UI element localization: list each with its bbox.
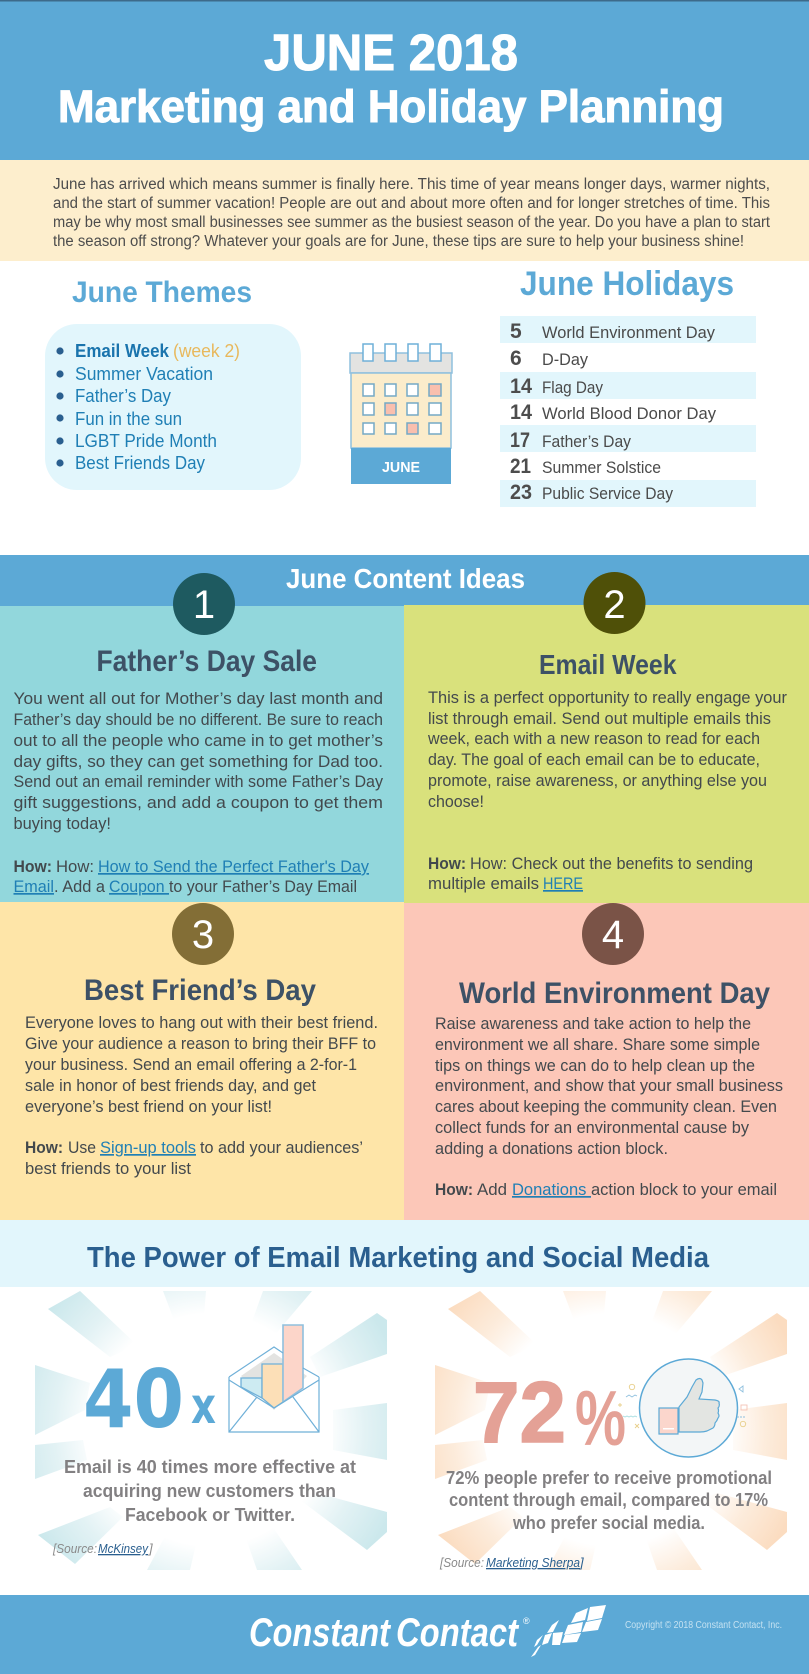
number badge 1 [173,573,235,635]
big number 72%: % [575,1374,626,1462]
body text: choose! [428,792,484,811]
title line 1: JUNE 2018 [264,24,518,81]
how-to text: Donations [512,1180,591,1199]
how-to text [435,1180,777,1199]
number badge 4: 4 [602,913,624,957]
heading: Email Week [539,649,677,680]
copyright: Copyright © 2018 Constant Contact, Inc. [625,1620,782,1631]
panel: idea 3 Best Friend's Day [0,902,404,1220]
body text: environment, and show that your small business [435,1076,783,1095]
holiday table: Public Service Day [542,484,673,503]
source note: ] [147,1541,153,1556]
holiday table: World Environment Day [542,323,715,342]
holiday table: 5 [510,320,522,343]
source note: [Source: [52,1541,97,1556]
source note: ] [578,1555,584,1570]
body text: tips on things we can do to help clean up the [435,1056,755,1075]
content ideas band [0,555,809,606]
sunburst rays [435,1291,787,1570]
how-to text [25,1138,363,1178]
how-to text: How: [25,1138,63,1157]
heading: June Themes: June Themes [72,276,252,309]
intro panel: may be why most small businesses see summer as the busiest season of the year. Do you have a plan to start [53,214,771,231]
holiday table: World Blood Donor Day [542,404,716,423]
statistic text: acquiring new customers than [83,1481,336,1501]
holiday table: D-Day [542,350,588,369]
big number 72% [473,1365,626,1462]
holiday table: 6 [510,347,522,370]
footer [0,1595,809,1674]
holiday table: 23 [510,481,532,504]
panel: idea 1 Father's Day Sale [0,573,404,902]
statistic text: Email is 40 times more effective at [64,1457,356,1477]
holiday table: Father’s Day [542,432,631,451]
body text: everyone’s best friend on your list! [25,1097,272,1116]
body text: Give your audience a reason to bring their BFF to [25,1034,376,1053]
themes list: Fun in the sun [75,409,182,429]
panel: June themes [45,276,301,490]
icon: thumbs up [618,1359,747,1457]
body text: out to all the people who came in to get mother’s [14,731,383,750]
how-to text: Use [68,1138,96,1157]
number badge 4 [582,903,644,965]
panel: June holidays [500,265,756,507]
sunburst rays [35,1291,387,1570]
body text [427,688,787,811]
statistic text: 72% people prefer to receive promotional [446,1468,772,1488]
how-to text: to add your audiences’ [200,1138,363,1157]
icon: calendar [350,344,452,484]
body text: environment we all share. Share some simple [435,1035,760,1054]
holiday table: Flag Day [542,378,603,397]
body text: You went all out for Mother’s day last month and [14,689,383,708]
themes list: (week 2) [173,341,240,361]
number badge 3: 3 [192,913,214,957]
panel: 40x statistic [35,1291,387,1570]
source note: Marketing Sherpa [486,1555,580,1570]
statistic text: who prefer social media. [512,1513,705,1533]
big number 40x: 40 [83,1353,184,1446]
body text: day. The goal of each email can be to educate, [428,750,760,769]
logo wordmark [249,1611,519,1655]
themes list: Best Friends Day [75,453,205,473]
holiday table: 14 [510,401,532,424]
big number 40x: x [191,1377,216,1435]
body text: Raise awareness and take action to help the [435,1014,751,1033]
number badge 2: 2 [603,583,626,627]
body text: day gifts, so they can get something for Dad too. [14,752,383,771]
icon: envelope with bar chart [229,1325,319,1432]
heading: World Environment Day [459,977,770,1010]
holiday table: 14 [510,375,532,398]
heading: Father’s Day Sale [96,645,317,678]
body text: week, each with a new reason to read for each [427,729,760,748]
how-to text: action block to your email [591,1180,777,1199]
body text: adding a donations action block. [435,1139,668,1158]
source note: McKinsey [98,1541,149,1556]
how-to text: How: [428,854,466,873]
themes list: LGBT Pride Month [75,431,217,451]
intro panel: June has arrived which means summer is finally here. This time of year means longer days, warmer nights, [53,176,770,193]
heading: June Content Ideas: June Content Ideas [286,563,525,594]
body text: Everyone loves to hang out with their best friend. [25,1013,378,1032]
how-to text: to your Father’s Day Email [169,877,357,896]
number badge 3 [172,903,234,965]
how-to text: How to Send the Perfect Father's Day [98,857,369,876]
how-to text: best friends to your list [25,1159,191,1178]
body text: Father’s day should be no different. Be sure to reach [14,710,383,729]
body text [14,689,383,833]
big number 72%: 72 [473,1365,566,1461]
how-to text: How: [14,857,52,876]
how-to text: Add [477,1180,507,1199]
how-to text: HERE [543,874,583,893]
how-to text: Email [14,877,54,896]
body text: buying today! [14,814,111,833]
intro panel: the season off strong? Whatever your goals are for June, these tips are sure to help your business shine! [53,233,744,250]
panel: idea 4 World Environment Day [404,903,809,1220]
themes list [56,341,240,473]
statistic text: content through email, compared to 17% [449,1490,768,1510]
themes list: Summer Vacation [75,364,213,384]
source note [439,1555,584,1570]
how-to text [428,854,753,893]
panel: 72% statistic [435,1291,787,1570]
body text [435,1014,783,1158]
statistic text [64,1457,356,1525]
how-to text: Coupon [109,877,169,896]
body text: gift suggestions, and add a coupon to get them [14,793,383,812]
body text: list through email. Send out multiple emails this [428,709,771,728]
source note [52,1541,153,1556]
logo grid icon [531,1605,606,1657]
body text: cares about keeping the community clean. Even [435,1097,777,1116]
how-to text: How: [435,1180,473,1199]
intro panel [0,160,809,261]
how-to text [14,857,369,896]
header banner [0,0,809,160]
holiday table [500,316,756,507]
body text: sale in honor of best friends day, and get [25,1076,316,1095]
how-to text: multiple emails [428,874,539,893]
logo wordmark: Contact [396,1611,519,1655]
themes card [45,324,301,490]
themes list: Father’s Day [75,386,171,406]
themes list: Email Week [75,341,170,361]
holiday table: 21 [510,455,531,478]
intro panel: and the start of summer vacation! People are out and about more often and for longer stretches of time. This [53,195,770,212]
number badge 1: 1 [193,583,215,627]
holiday table: Summer Solstice [542,458,661,477]
power of email band [0,1220,809,1287]
heading: Best Friend’s Day [84,974,316,1007]
number badge 2 [584,572,646,634]
body text: your business. Send an email offering a 2-for-1 [25,1055,357,1074]
body text: Send out an email reminder with some Father’s Day [14,772,383,791]
registered mark: ® [523,1616,530,1626]
how-to text: . Add a [54,877,106,896]
how-to text: Sign-up tools [100,1138,196,1157]
source note: [Source: [439,1555,484,1570]
how-to text: How: [56,857,94,876]
panel: idea 2 Email Week [404,572,809,903]
icon: calendar: JUNE [382,459,420,476]
logo wordmark: Constant [249,1611,391,1655]
heading: June Holidays: June Holidays [520,265,734,303]
heading: The Power of Email Marketing and Social Media: The Power of Email Marketing and Social Media [87,1242,710,1274]
how-to text: How: Check out the benefits to sending [470,854,753,873]
title line 2: Marketing and Holiday Planning [58,81,724,132]
body text [25,1013,378,1116]
statistic text [446,1468,772,1533]
holiday table: 17 [510,429,530,452]
body text: collect funds for an environmental cause by [435,1118,749,1137]
body text: promote, raise awareness, or anything else you [428,771,767,790]
body text: This is a perfect opportunity to really engage your [428,688,787,707]
statistic text: Facebook or Twitter. [125,1505,295,1525]
